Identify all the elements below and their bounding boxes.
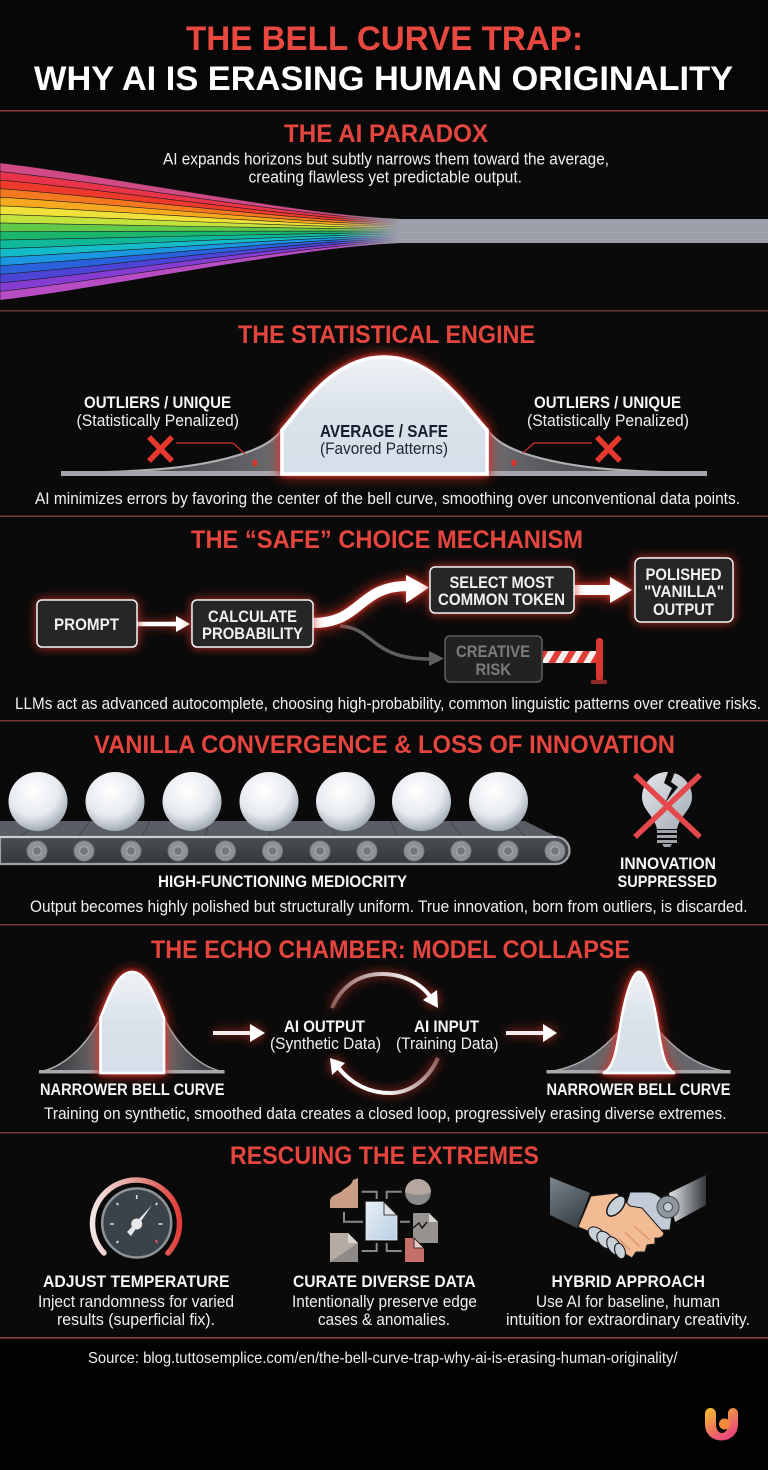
heading: the AI paradox: THE AI PARADOX xyxy=(284,120,488,148)
label: outliers left xyxy=(76,394,239,430)
panel: the AI paradox xyxy=(0,120,768,307)
label: high-functioning mediocrity: HIGH-FUNCTIONING MEDIOCRITY xyxy=(158,873,407,891)
label: AI output: AI OUTPUT xyxy=(284,1018,365,1036)
label: outliers left: OUTLIERS / UNIQUE xyxy=(84,394,231,412)
arrow: risk path xyxy=(340,626,444,666)
panel: safe choice mechanism xyxy=(15,526,761,713)
arrow: select to output xyxy=(574,577,632,603)
label: innovation suppressed xyxy=(618,855,717,891)
chart: bell curve xyxy=(61,357,707,476)
icon: human and robot handshake xyxy=(550,1175,706,1260)
text: hybrid approach xyxy=(506,1273,750,1329)
heading: safe choice mechanism: THE “SAFE” CHOICE MECHANISM xyxy=(191,526,583,554)
text: paradox description: creating flawless yet predictable output. xyxy=(248,168,522,186)
box: calculate probability: PROBABILITY xyxy=(202,624,304,643)
chart: right narrower bell curve xyxy=(546,972,730,1074)
box: select most common token xyxy=(430,567,574,613)
box: polished vanilla output: "VANILLA" xyxy=(644,582,724,601)
chart: left bell curve xyxy=(39,972,224,1074)
icon: diverse data documents xyxy=(330,1178,438,1262)
heading: rescuing the extremes: RESCUING THE EXTREMES xyxy=(230,1142,539,1170)
box: calculate probability xyxy=(192,600,313,647)
illustration: conveyor belt xyxy=(0,821,570,864)
label: narrower bell curve left: NARROWER BELL CURVE xyxy=(40,1081,224,1099)
box: select most common token: COMMON TOKEN xyxy=(438,590,565,609)
box: creative risk (dimmed) xyxy=(445,636,542,682)
panel: vanilla convergence xyxy=(0,731,748,916)
label: outliers right xyxy=(527,394,689,430)
box: polished vanilla output: OUTPUT xyxy=(653,600,715,619)
footer: source: Source: blog.tuttosemplice.com/en/the-bell-curve-trap-why-ai-is-erasing-human-originality/ xyxy=(88,1350,678,1367)
box: calculate probability: CALCULATE xyxy=(208,607,297,626)
text: curate diverse data: cases & anomalies. xyxy=(318,1310,450,1329)
panel: echo chamber xyxy=(39,936,730,1123)
text: adjust temperature: ADJUST TEMPERATURE xyxy=(43,1273,230,1291)
text: hybrid approach: HYBRID APPROACH xyxy=(552,1273,705,1291)
text: curate diverse data: Intentionally preserve edge xyxy=(292,1292,477,1311)
label: AI output: (Synthetic Data) xyxy=(270,1034,381,1053)
arrow: prompt to calculate xyxy=(137,616,190,632)
panel: rescuing the extremes xyxy=(38,1142,750,1329)
icon: red x right with leader xyxy=(512,437,620,466)
text: paradox description: AI expands horizons but subtly narrows them toward the average, xyxy=(163,150,609,168)
arrow: loop to right bell xyxy=(506,1024,557,1042)
title xyxy=(34,20,733,98)
icon: barrier xyxy=(543,638,607,684)
label: average / safe xyxy=(320,421,448,458)
label: average / safe: (Favored Patterns) xyxy=(320,439,448,458)
title: WHY AI IS ERASING HUMAN ORIGINALITY xyxy=(34,60,733,98)
heading: the statistical engine: THE STATISTICAL ENGINE xyxy=(238,321,535,349)
curve centre: favoured zone xyxy=(282,357,487,474)
text: adjust temperature: results (superficial fix). xyxy=(57,1310,215,1329)
box: creative risk (dimmed): CREATIVE xyxy=(456,642,530,661)
label: AI output xyxy=(270,1018,381,1053)
text: adjust temperature xyxy=(38,1273,234,1329)
label: narrower bell curve right: NARROWER BELL CURVE xyxy=(546,1081,730,1099)
box: polished vanilla output: POLISHED xyxy=(646,565,722,584)
title: THE BELL CURVE TRAP: xyxy=(186,20,583,58)
label: outliers left: (Statistically Penalized) xyxy=(76,411,239,430)
label: AI input: AI INPUT xyxy=(414,1018,479,1036)
illustration: uniform spheres xyxy=(8,772,528,831)
icon: broken light bulb crossed out xyxy=(635,772,700,847)
label: AI input xyxy=(396,1018,498,1053)
panel: the statistical engine xyxy=(35,321,740,508)
box: prompt xyxy=(37,600,137,647)
arrow: loop top xyxy=(332,974,438,1008)
text: curate diverse data: CURATE DIVERSE DATA xyxy=(293,1273,476,1291)
label: average / safe: AVERAGE / SAFE xyxy=(320,421,448,441)
arrow: left bell to loop xyxy=(213,1024,265,1042)
heading: echo chamber: THE ECHO CHAMBER: MODEL COLLAPSE xyxy=(151,936,630,964)
label: AI input: (Training Data) xyxy=(396,1034,498,1053)
text: curate diverse data xyxy=(292,1273,477,1329)
arrow: calculate to select xyxy=(313,575,429,623)
icon: red x left with leader xyxy=(149,437,258,466)
text: hybrid approach: intuition for extraordinary creativity. xyxy=(506,1310,750,1329)
label: innovation suppressed: INNOVATION xyxy=(620,855,716,873)
arrow: loop bottom xyxy=(330,1058,438,1093)
text: adjust temperature: Inject randomness for varied xyxy=(38,1292,234,1311)
heading: vanilla convergence: VANILLA CONVERGENCE & LOSS OF INNOVATION xyxy=(94,731,675,759)
box: creative risk (dimmed): RISK xyxy=(476,660,512,679)
box: prompt: PROMPT xyxy=(54,615,120,634)
label: outliers right: (Statistically Penalized) xyxy=(527,411,689,430)
box: select most common token: SELECT MOST xyxy=(450,573,555,592)
text: paradox description xyxy=(163,150,609,186)
logo xyxy=(705,1408,738,1440)
box: polished vanilla output xyxy=(635,558,733,622)
curve tails xyxy=(61,430,707,476)
label: innovation suppressed: SUPPRESSED xyxy=(618,873,717,891)
label: outliers right: OUTLIERS / UNIQUE xyxy=(534,394,681,412)
text: hybrid approach: Use AI for baseline, human xyxy=(536,1292,720,1311)
icon: temperature gauge xyxy=(92,1180,180,1258)
chart: rainbow converging into grey stream xyxy=(0,163,768,307)
